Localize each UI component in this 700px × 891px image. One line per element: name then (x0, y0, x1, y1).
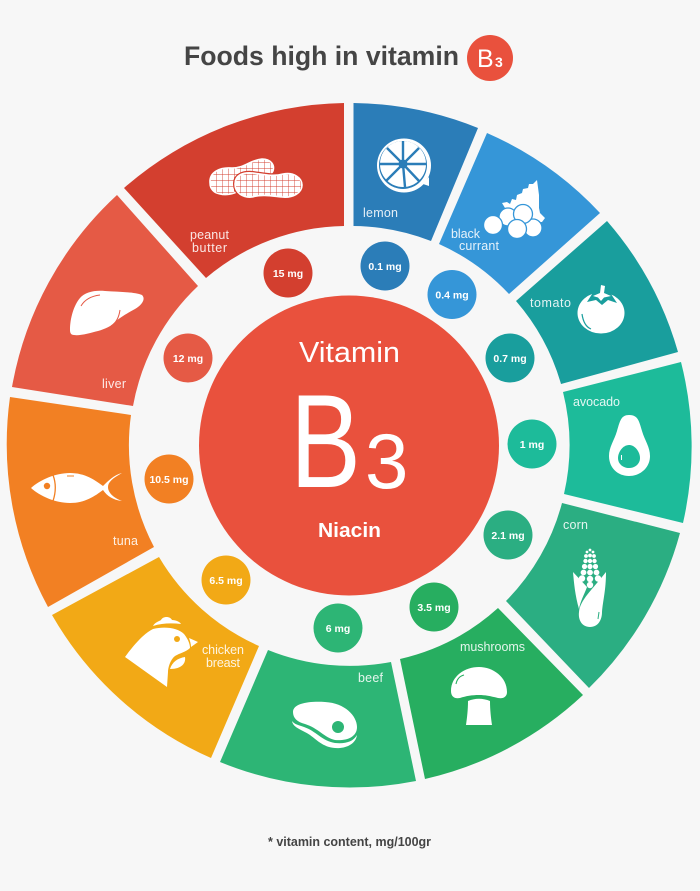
value bubble: black currant (428, 270, 476, 319)
panel: beef (220, 650, 416, 788)
value bubble: tuna: 10.5 mg (149, 474, 189, 486)
value bubble: tomato: 0.7 mg (493, 353, 527, 365)
value bubble: tomato (486, 334, 534, 382)
value bubble: peanut butter: 15 mg (273, 268, 303, 280)
panel: mushrooms (400, 608, 583, 779)
panel: avocado (563, 362, 692, 523)
title: 3 (495, 54, 503, 70)
value bubble: corn (484, 510, 532, 560)
title (184, 35, 513, 81)
panel: chicken breast (52, 557, 259, 758)
label: tomato (530, 296, 571, 310)
value bubble: lemon: 0.1 mg (368, 261, 402, 273)
icon: liver (70, 291, 144, 335)
label: tuna (113, 534, 138, 548)
label: lemon (363, 206, 398, 220)
panel: corn (506, 503, 680, 688)
icon: mushroom (451, 667, 507, 725)
label: butter (192, 241, 227, 255)
footnote: * vitamin content, mg/100gr (268, 834, 431, 849)
icon: corn (573, 549, 606, 627)
value bubble: mushrooms: 3.5 mg (417, 602, 451, 614)
title: B (477, 45, 494, 73)
heading: Niacin: Niacin (318, 520, 381, 542)
heading: B3: B (290, 367, 361, 516)
value bubble: beef: 6 mg (326, 623, 350, 635)
value bubble: lemon (360, 242, 410, 290)
label: corn (563, 518, 588, 532)
center circle: vitamin B3 (199, 296, 499, 596)
value bubble: avocado (508, 420, 556, 468)
icon: peanuts (210, 159, 302, 197)
heading: Vitamin: Vitamin (299, 337, 400, 369)
icon: fish (31, 473, 122, 503)
panel: tuna (7, 397, 154, 607)
value bubble: chicken breast: 6.5 mg (209, 575, 243, 587)
label: currant (459, 239, 500, 253)
value bubble: peanut butter (264, 248, 312, 298)
panel: tomato (516, 221, 678, 384)
heading: subscript 3: 3 (365, 417, 408, 505)
value bubble: chicken breast (202, 556, 250, 604)
panel: lemon (354, 103, 478, 241)
icon: lemon (377, 138, 431, 192)
value bubble: corn: 2.1 mg (491, 530, 525, 542)
label: avocado (573, 395, 620, 409)
value bubble: black currant: 0.4 mg (435, 290, 469, 302)
icon: tomato (578, 285, 624, 334)
icon: avocado (609, 415, 650, 476)
label: peanut (190, 228, 230, 242)
label: mushrooms (460, 640, 525, 654)
title: Foods high in vitamin (184, 41, 459, 71)
value bubble: tuna (144, 454, 194, 504)
panel: peanut butter (124, 103, 344, 278)
label: beef (358, 671, 384, 685)
label: breast (206, 656, 241, 670)
value bubble: liver: 12 mg (173, 353, 203, 365)
value bubble: beef (314, 604, 362, 652)
icon: black currant (484, 180, 545, 238)
panel: liver (12, 195, 198, 406)
value bubble: mushrooms (410, 582, 458, 632)
label: liver (102, 377, 126, 391)
panel: black currant (439, 133, 600, 294)
icon: chicken (125, 617, 198, 687)
value bubble: avocado: 1 mg (520, 439, 544, 451)
value bubble: liver (164, 334, 212, 382)
label: black (451, 227, 481, 241)
label: chicken (202, 643, 244, 657)
icon: beef (292, 702, 357, 748)
